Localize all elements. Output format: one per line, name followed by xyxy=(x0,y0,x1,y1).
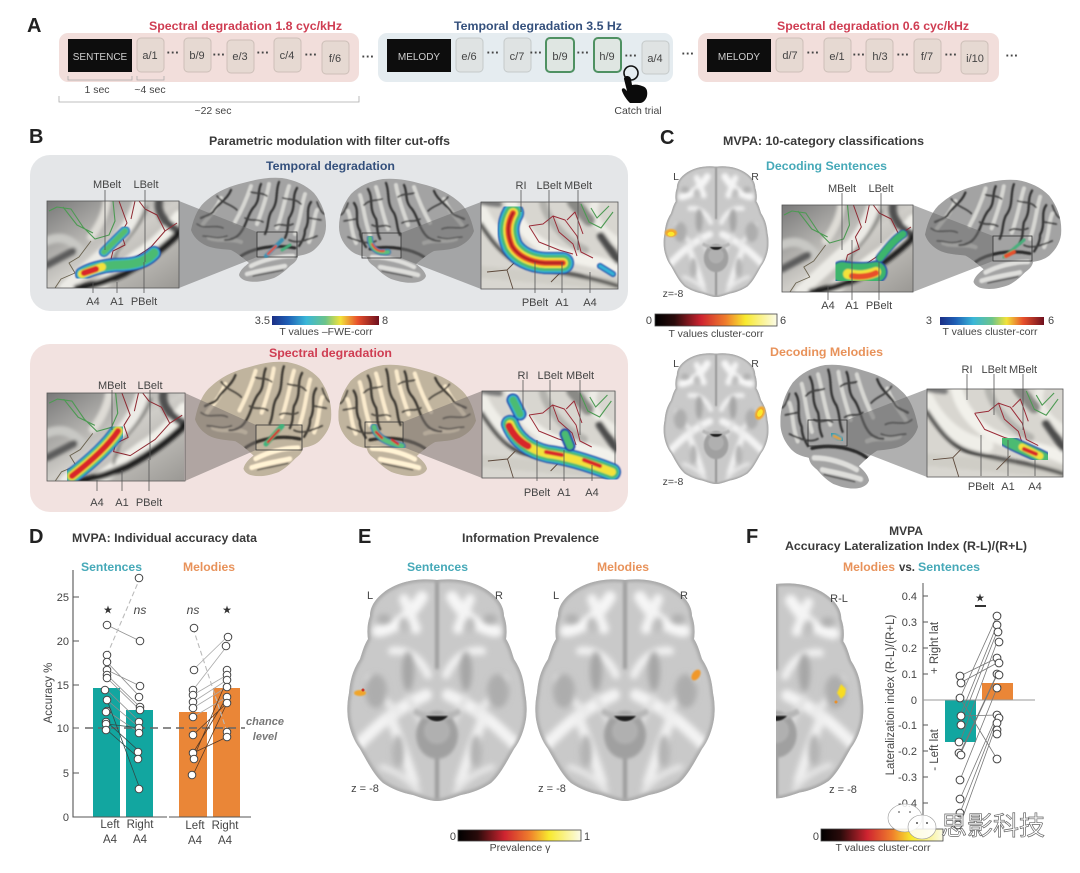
region labels xyxy=(962,364,1042,493)
brain: right hemisphere xyxy=(336,177,476,287)
axial slice: prevalence melodies: z = -8 xyxy=(538,783,566,795)
lateral brain: melodies xyxy=(777,363,927,494)
block: spectral degradation 0.6 cyc/kHz: ··· xyxy=(896,47,910,62)
heading: E sentences: Sentences xyxy=(407,560,468,574)
block: spectral degradation 1.8 cyc/kHz: b/9 xyxy=(189,50,205,62)
timing brackets: ~4 sec xyxy=(134,84,166,96)
inset zoom wedges xyxy=(179,201,481,289)
chart D: accuracy bars: level xyxy=(253,731,278,743)
heading B: Parametric modulation with filter cut-offs xyxy=(209,134,450,148)
axes: 0.2 xyxy=(902,643,917,655)
heading E: Information Prevalence xyxy=(462,531,599,545)
paired lines xyxy=(960,616,997,825)
inset: melodies decoding xyxy=(927,374,1063,477)
heading F xyxy=(785,524,1027,553)
region labels: MBelt xyxy=(828,183,856,195)
colorbar: hot: 0 xyxy=(646,315,652,327)
region labels: PBelt xyxy=(524,487,550,499)
x labels: A4 xyxy=(188,835,203,847)
region labels: A4 xyxy=(86,296,100,308)
chance level line xyxy=(85,727,245,729)
brain: left hemisphere xyxy=(193,360,334,481)
block: spectral degradation 1.8 cyc/kHz: ··· xyxy=(304,47,318,62)
axial slice: prevalence sentences: R xyxy=(495,590,503,602)
axes: 10 xyxy=(57,723,69,735)
inset: sentences decoding xyxy=(782,193,913,300)
axial slice: sentences: R xyxy=(751,171,759,183)
axial slice: prevalence melodies: R xyxy=(680,590,688,602)
half axial slice: R-L xyxy=(776,583,864,798)
colorbar: jet: T values cluster-corr xyxy=(943,326,1038,338)
region labels: PBelt xyxy=(968,481,994,493)
inset: right auditory cortex xyxy=(481,190,618,293)
x labels xyxy=(100,819,239,847)
block: spectral degradation 1.8 cyc/kHz: ··· xyxy=(256,45,270,60)
panel label F: F xyxy=(746,526,758,548)
region labels: LBelt xyxy=(868,183,894,195)
colorbar: prevalence: Prevalence γ xyxy=(490,842,551,854)
block: temporal degradation 3.5 Hz: e/6 xyxy=(461,51,477,63)
catch trial label: Catch trial xyxy=(614,105,662,117)
region labels: PBelt xyxy=(522,297,548,309)
timing brackets: 1 sec xyxy=(84,84,110,96)
region labels: A4 xyxy=(585,487,599,499)
axes: Lateralization index (R-L)/(R+L) xyxy=(885,614,897,775)
axes: 0.1 xyxy=(902,669,917,681)
significance mark xyxy=(975,593,986,607)
heading C: MVPA: 10-category classifications xyxy=(723,134,924,148)
axial slice: prevalence sentences: L xyxy=(367,590,373,602)
panel: spectral degradation xyxy=(30,344,628,512)
significance marks: ★ xyxy=(222,605,232,615)
region labels: MBelt xyxy=(93,179,121,191)
block: spectral degradation 0.6 cyc/kHz: ··· xyxy=(852,47,866,62)
significance marks xyxy=(103,603,232,617)
inset zoom wedges xyxy=(185,391,482,481)
colorbar: T values FWE-corr: 8 xyxy=(382,315,388,327)
colorbar: hot xyxy=(646,314,786,340)
half axial slice: R-L: z = -8 xyxy=(829,784,857,796)
x labels: Left xyxy=(100,819,120,831)
block: spectral degradation 1.8 cyc/kHz xyxy=(59,33,359,82)
axes xyxy=(885,583,1035,832)
block: spectral degradation 0.6 cyc/kHz: f/7 xyxy=(921,51,933,63)
region labels: RI xyxy=(518,370,528,382)
category label: sentences: Sentences xyxy=(81,560,142,574)
block: temporal degradation 3.5 Hz: ··· xyxy=(530,45,542,60)
block: spectral degradation 0.6 cyc/kHz: ··· xyxy=(944,47,958,62)
block: temporal degradation 3.5 Hz: ··· xyxy=(624,48,638,63)
region labels: PBelt xyxy=(136,497,162,509)
subheading: melodies vs sentences: Melodies xyxy=(843,560,895,574)
block: spectral degradation 0.6 cyc/kHz: i/10 xyxy=(966,53,984,65)
region labels: A1 xyxy=(557,487,571,499)
block: spectral degradation 0.6 cyc/kHz: h/3 xyxy=(872,51,888,63)
region labels: PBelt xyxy=(131,296,157,308)
data points xyxy=(954,612,1003,829)
colorbar: jet: 6 xyxy=(1048,315,1054,327)
axes: 20 xyxy=(57,636,69,648)
panel: temporal degradation xyxy=(30,155,628,311)
x labels: Left xyxy=(185,820,205,832)
block: temporal degradation 3.5 Hz xyxy=(378,33,673,82)
icon: catch trial hand xyxy=(622,66,647,103)
colorbar: jet xyxy=(926,315,1054,338)
axial slice: melodies xyxy=(663,352,770,488)
axes: Accuracy % xyxy=(43,663,55,723)
region labels: A4 xyxy=(821,300,835,312)
region labels: LBelt xyxy=(133,179,159,191)
axes xyxy=(43,570,251,824)
panel A: experimental timeline xyxy=(59,19,1018,117)
panel label B: B xyxy=(29,126,43,148)
colorbar: F: T values cluster-corr xyxy=(836,842,931,854)
region labels: A4 xyxy=(1028,481,1042,493)
bars xyxy=(945,683,1013,742)
colorbar: prevalence: 1 xyxy=(584,831,590,843)
block: temporal degradation 3.5 Hz: ··· xyxy=(576,45,590,60)
axes: - Left lat xyxy=(929,728,941,771)
axial slice: melodies: L xyxy=(673,358,679,370)
region labels: LBelt xyxy=(537,370,563,382)
paired lines xyxy=(107,578,227,789)
region labels: RI xyxy=(962,364,972,376)
region labels: MBelt xyxy=(98,380,126,392)
x labels: A4 xyxy=(103,834,118,846)
axial slice: melodies: R xyxy=(751,358,759,370)
region labels: LBelt xyxy=(137,380,163,392)
block: spectral degradation 1.8 cyc/kHz: e/3 xyxy=(232,51,248,63)
brain: right hemisphere xyxy=(335,363,478,481)
region labels: MBelt xyxy=(1009,364,1037,376)
axial slice: prevalence sentences xyxy=(346,577,530,805)
axial slice: prevalence sentences: z = -8 xyxy=(351,783,379,795)
axes: -0.3 xyxy=(898,772,917,784)
subheading: melodies vs sentences xyxy=(843,560,980,574)
axial slice: prevalence melodies xyxy=(534,577,718,805)
axes: 0.4 xyxy=(902,591,917,603)
axial slice: prevalence melodies: L xyxy=(553,590,559,602)
region labels: PBelt xyxy=(866,300,892,312)
block: spectral degradation 1.8 cyc/kHz: SENTENCE xyxy=(73,52,128,63)
colorbar: T values FWE-corr: 3.5 xyxy=(255,315,270,327)
colorbar: hot: 6 xyxy=(780,315,786,327)
block: temporal degradation 3.5 Hz: a/4 xyxy=(647,53,663,65)
timing brackets xyxy=(59,76,359,117)
region labels: MBelt xyxy=(564,180,592,192)
region labels: A4 xyxy=(583,297,597,309)
axial slice: sentences: L xyxy=(673,171,679,183)
block: spectral degradation 1.8 cyc/kHz: f/6 xyxy=(329,53,341,65)
region labels: LBelt xyxy=(536,180,562,192)
region labels: RI xyxy=(516,180,526,192)
watermark: chat bubbles and 思影科技: 思影科技 xyxy=(941,811,1045,841)
heading: decoding sentences: Decoding Sentences xyxy=(766,159,887,173)
heading F: MVPA xyxy=(889,524,923,538)
x labels: A4 xyxy=(133,834,148,846)
block heading: temporal 3.5: Temporal degradation 3.5 Hz xyxy=(454,19,622,33)
block: spectral degradation 1.8 cyc/kHz: a/1 xyxy=(142,50,158,62)
block: spectral degradation 0.6 cyc/kHz xyxy=(698,33,999,82)
panel A: experimental timeline: ··· xyxy=(1006,48,1018,63)
category label: melodies: Melodies xyxy=(183,560,235,574)
significance mark: ★ xyxy=(975,593,985,603)
half axial slice: R-L: R-L xyxy=(830,593,848,605)
axes: 0 xyxy=(63,812,69,824)
timing brackets: ~22 sec xyxy=(194,105,232,117)
block: spectral degradation 0.6 cyc/kHz: MELODY xyxy=(718,52,760,63)
axial slice: melodies: z=-8 xyxy=(663,476,684,488)
significance marks: ns xyxy=(187,603,199,617)
subheading: melodies vs sentences: vs. xyxy=(899,560,915,574)
block: spectral degradation 0.6 cyc/kHz: d/7 xyxy=(782,50,798,62)
chart D: accuracy bars xyxy=(43,560,284,847)
chance level label: chance xyxy=(246,716,284,728)
inset: left auditory cortex xyxy=(47,390,185,491)
region labels: A1 xyxy=(1001,481,1015,493)
region labels: A1 xyxy=(555,297,569,309)
axes: + Right lat xyxy=(929,621,941,674)
colorbar: jet: 3 xyxy=(926,315,932,327)
panel A: experimental timeline: ··· xyxy=(682,46,694,61)
block: spectral degradation 1.8 cyc/kHz: c/4 xyxy=(280,50,294,62)
inset: left auditory cortex xyxy=(47,190,179,293)
heading: temporal degradation: Temporal degradation xyxy=(266,159,395,173)
colorbar: T values FWE-corr xyxy=(255,315,388,338)
block: spectral degradation 0.6 cyc/kHz: e/1 xyxy=(829,51,845,63)
region labels: MBelt xyxy=(566,370,594,382)
block heading: spectral 0.6: Spectral degradation 0.6 cyc/kHz xyxy=(777,19,969,33)
block: spectral degradation 1.8 cyc/kHz: ··· xyxy=(212,47,226,62)
brain: left hemisphere xyxy=(189,176,329,286)
axial slice: sentences: z=-8 xyxy=(663,288,684,300)
axes: 0.3 xyxy=(902,617,917,629)
region labels xyxy=(821,183,894,312)
block: temporal degradation 3.5 Hz: MELODY xyxy=(398,52,440,63)
block: temporal degradation 3.5 Hz: ··· xyxy=(486,45,500,60)
hotspots on brains xyxy=(266,426,402,446)
axes: 25 xyxy=(57,592,69,604)
axes: -0.1 xyxy=(898,720,917,732)
lateral brain: sentences xyxy=(913,178,1064,293)
significance marks: ns xyxy=(134,603,146,617)
hotspots on brains xyxy=(266,238,388,256)
data points xyxy=(101,574,232,793)
heading: spectral degradation: Spectral degradation xyxy=(269,346,392,360)
axial slice: sentences xyxy=(663,165,770,300)
heading: E melodies: Melodies xyxy=(597,560,649,574)
block: temporal degradation 3.5 Hz: c/7 xyxy=(510,51,524,63)
colorbar: prevalence: 0 xyxy=(450,831,456,843)
x labels: A4 xyxy=(218,835,233,847)
panel label C: C xyxy=(660,127,674,149)
region labels xyxy=(90,370,599,509)
axes: -0.2 xyxy=(898,746,917,758)
region labels xyxy=(86,179,597,309)
axes: 5 xyxy=(63,768,69,780)
panel label E: E xyxy=(358,526,371,548)
panel label D: D xyxy=(29,526,43,548)
x labels: Right xyxy=(127,819,154,831)
colorbar: hot: T values cluster-corr xyxy=(669,328,764,340)
region labels: A4 xyxy=(90,497,104,509)
panel A: experimental timeline: ··· xyxy=(362,49,374,64)
significance marks: ★ xyxy=(103,605,113,615)
bars xyxy=(93,688,240,817)
x labels: Right xyxy=(212,820,239,832)
panel label A: A xyxy=(27,15,41,37)
region labels: A1 xyxy=(115,497,129,509)
subheading: melodies vs sentences: Sentences xyxy=(918,560,980,574)
heading D: MVPA: Individual accuracy data xyxy=(72,531,257,545)
inset: right auditory cortex xyxy=(482,380,616,481)
chart F: lateralization index xyxy=(885,583,1035,832)
region labels: LBelt xyxy=(981,364,1007,376)
axes: 0 xyxy=(911,695,917,707)
colorbar: F xyxy=(813,829,943,854)
colorbar: F: 0 xyxy=(813,831,819,843)
block: spectral degradation 1.8 cyc/kHz: ··· xyxy=(166,45,180,60)
axes: 15 xyxy=(57,680,69,692)
colorbar: prevalence xyxy=(450,830,590,854)
block: temporal degradation 3.5 Hz: b/9 xyxy=(552,51,568,63)
block: temporal degradation 3.5 Hz: h/9 xyxy=(599,51,615,63)
region labels: A1 xyxy=(845,300,859,312)
watermark: chat bubbles and 思影科技 xyxy=(888,804,1045,841)
region labels: A1 xyxy=(110,296,124,308)
block heading: spectral 1.8: Spectral degradation 1.8 cyc/kHz xyxy=(149,19,342,33)
heading F: Accuracy Lateralization Index (R-L)/(R+L) xyxy=(785,539,1027,553)
heading: decoding melodies: Decoding Melodies xyxy=(770,345,883,359)
colorbar: T values FWE-corr: T values –FWE-corr xyxy=(279,326,373,338)
block: spectral degradation 0.6 cyc/kHz: ··· xyxy=(806,45,820,60)
axes: -0.4 xyxy=(898,798,917,810)
